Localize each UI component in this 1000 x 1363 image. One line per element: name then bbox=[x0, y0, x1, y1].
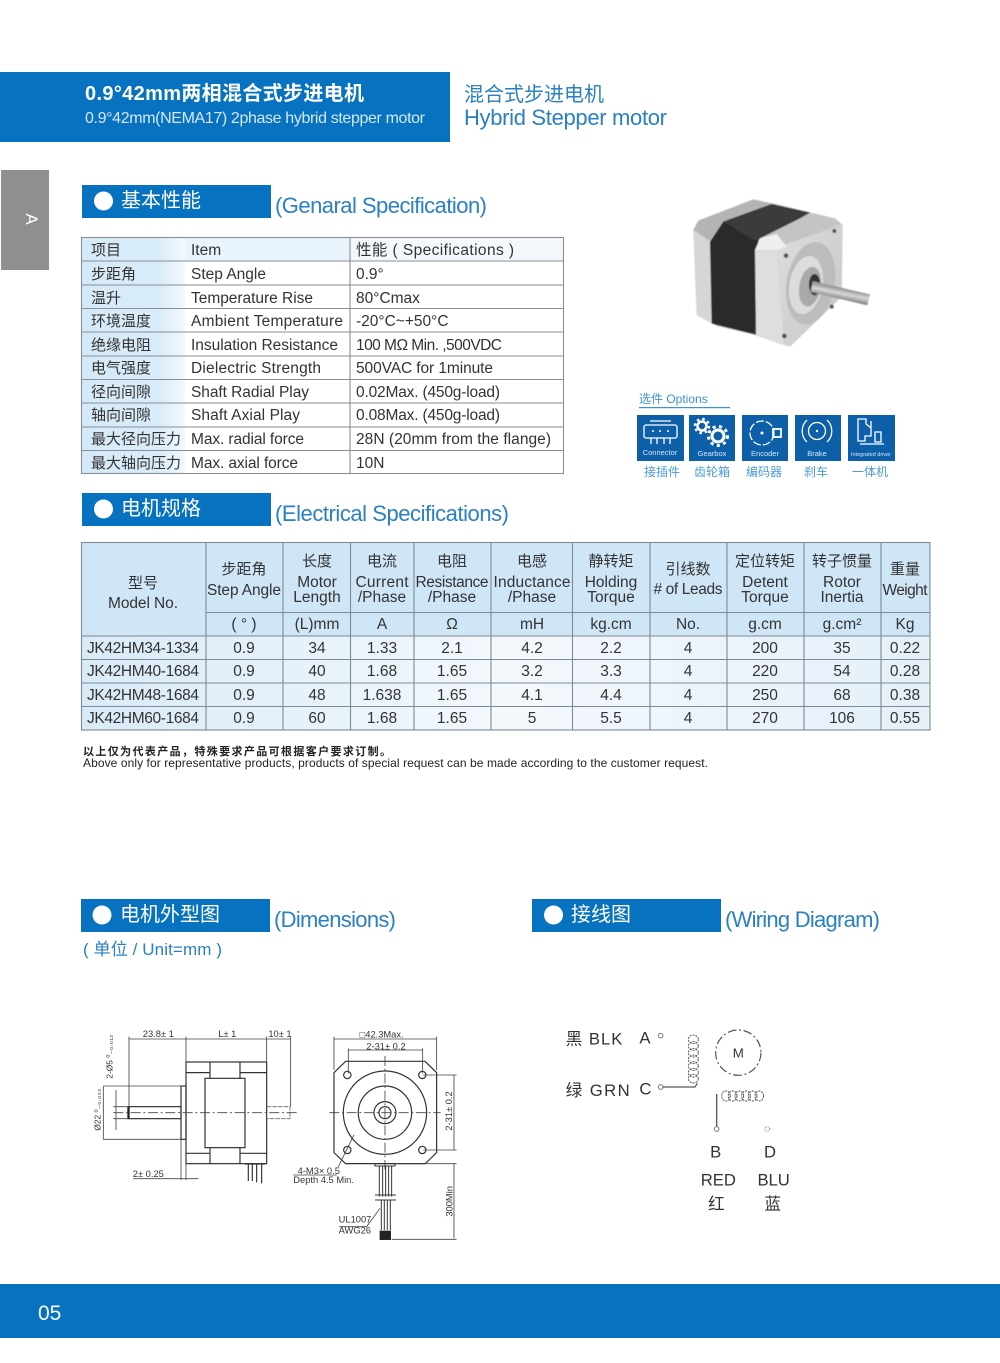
table rows: electrical specifications: JK42HM34-1334 bbox=[87, 640, 199, 657]
table rows: electrical specifications: 1.33 bbox=[367, 640, 397, 657]
table header: electrical specifications: 长度 bbox=[302, 553, 332, 570]
table rows: general specification bbox=[91, 241, 551, 472]
table units: electrical specifications bbox=[231, 616, 914, 633]
wiring diagram: 黑 BLK bbox=[566, 1029, 622, 1048]
motor photo bbox=[693, 199, 870, 347]
side tab: A bbox=[1, 170, 49, 270]
coil: B-D bbox=[722, 1091, 764, 1101]
table rows: electrical specifications: 3.2 bbox=[521, 663, 543, 680]
table header: electrical specifications: 重量 bbox=[890, 561, 920, 578]
table rows: general specification: Ambient Temperature bbox=[191, 313, 343, 330]
table rows: general specification: 0.9° bbox=[356, 266, 384, 283]
table rows: general specification: 10N bbox=[356, 455, 384, 472]
heading: general specification: (Genaral Specification) bbox=[275, 193, 487, 218]
table rows: general specification: 项目 bbox=[91, 242, 121, 259]
heading: dimensions: 电机外型图 bbox=[120, 903, 220, 926]
side view: 2-Ø5 ⁰₋₀.₀₁₂ bbox=[105, 1035, 115, 1079]
table rows: electrical specifications: 4 bbox=[684, 640, 693, 657]
table rows: general specification: Shaft Radial Play bbox=[191, 384, 309, 401]
table rows: general specification: Max. axial force bbox=[191, 455, 298, 472]
table rows: electrical specifications: 0.9 bbox=[233, 687, 255, 704]
table rows: general specification: Max. radial force bbox=[191, 431, 304, 448]
table rows: general specification: 性能 ( Specifications ) bbox=[356, 241, 514, 259]
table header: electrical specifications: 定位转矩 bbox=[735, 553, 795, 570]
wiring diagram: A bbox=[639, 1029, 651, 1048]
side view: L± 1 bbox=[218, 1029, 236, 1039]
table rows: electrical specifications: 34 bbox=[308, 640, 326, 657]
options heading bbox=[639, 392, 730, 408]
heading: wiring diagram: 接线图 bbox=[571, 903, 631, 926]
table rows: electrical specifications: 35 bbox=[833, 640, 851, 657]
table rows: electrical specifications: 1.68 bbox=[367, 663, 397, 680]
category title: 混合式步进电机 bbox=[464, 83, 604, 106]
table rows: electrical specifications: 250 bbox=[752, 687, 778, 704]
table rows: general specification: 轴向间隙 bbox=[91, 407, 151, 424]
options labels: 齿轮箱 bbox=[694, 464, 730, 479]
table rows: general specification: 绝缘电阻 bbox=[91, 337, 151, 354]
icon: encoder: Encoder bbox=[751, 449, 779, 458]
table rows: electrical specifications: 1.68 bbox=[367, 710, 397, 727]
table rows: general specification: 最大轴向压力 bbox=[91, 455, 181, 472]
table rows: general specification: Temperature Rise bbox=[191, 290, 313, 307]
heading: dimensions bbox=[81, 899, 396, 959]
table header: electrical specifications: Inertia bbox=[820, 589, 864, 606]
table header: electrical specifications: Resistance bbox=[416, 574, 488, 591]
icon: gearbox bbox=[689, 415, 735, 461]
table units: electrical specifications: No. bbox=[676, 616, 700, 633]
motor symbol: M bbox=[733, 1046, 744, 1061]
side view bbox=[93, 1029, 298, 1183]
wire: B bbox=[715, 1094, 719, 1127]
wiring diagram: B bbox=[710, 1142, 721, 1161]
table rows: general specification: Item bbox=[191, 242, 221, 259]
heading: dimensions: ( 单位 / Unit=mm ) bbox=[83, 940, 222, 959]
front view: Depth 4.5 Min. bbox=[293, 1175, 354, 1185]
table units: electrical specifications: A bbox=[377, 616, 388, 633]
table header: electrical specifications: Torque bbox=[587, 589, 635, 606]
icon: connector: Connector bbox=[643, 448, 678, 457]
side tab: A: A bbox=[22, 213, 41, 225]
table units: electrical specifications: (L)mm bbox=[295, 616, 339, 633]
table header: electrical specifications bbox=[108, 553, 928, 612]
options labels bbox=[644, 464, 888, 479]
table header: electrical specifications: 步距角 bbox=[221, 561, 267, 578]
table rows: electrical specifications: 60 bbox=[308, 710, 326, 727]
front view bbox=[293, 1029, 457, 1240]
side view: Ø22 ⁰₋₀.₀₃₃ bbox=[93, 1089, 103, 1131]
table rows: general specification: 0.02Max. (450g-load) bbox=[356, 384, 500, 401]
table units: electrical specifications: ( ° ) bbox=[231, 616, 257, 633]
wiring diagram: 蓝 bbox=[764, 1194, 781, 1213]
wiring diagram: RED bbox=[701, 1171, 736, 1190]
table rows: electrical specifications: 4 bbox=[684, 663, 693, 680]
table: general specification bbox=[81, 237, 564, 474]
category title bbox=[464, 83, 667, 130]
table rows: electrical specifications: 3.3 bbox=[600, 663, 622, 680]
footnote bbox=[83, 744, 708, 770]
table rows: general specification: 500VAC for 1minute bbox=[356, 360, 493, 377]
table rows: electrical specifications: 48 bbox=[308, 687, 326, 704]
table rows: general specification: 电气强度 bbox=[91, 360, 151, 377]
wiring diagram: 绿 GRN bbox=[566, 1081, 630, 1100]
table header: electrical specifications: Step Angle bbox=[207, 582, 281, 599]
heading: general specification: 基本性能 bbox=[121, 189, 201, 212]
options labels: 刹车 bbox=[804, 464, 828, 479]
icon: integrated driver bbox=[848, 415, 895, 461]
table header: electrical specifications: 电阻 bbox=[437, 553, 467, 570]
table rows: general specification: 100 MΩ Min. ,500VDC bbox=[356, 337, 502, 354]
table header: electrical specifications: 引线数 bbox=[665, 561, 711, 578]
table rows: general specification: Insulation Resistance bbox=[191, 337, 338, 354]
wiring diagram: D bbox=[764, 1142, 776, 1161]
table rows: electrical specifications: 1.65 bbox=[437, 663, 467, 680]
dimension drawing bbox=[93, 1029, 457, 1240]
table header: electrical specifications: /Phase bbox=[428, 589, 476, 606]
table header: electrical specifications: 转子惯量 bbox=[812, 553, 872, 570]
table rows: electrical specifications: 1.65 bbox=[437, 710, 467, 727]
table rows: general specification: 最大径向压力 bbox=[91, 431, 181, 448]
table header: electrical specifications: # of Leads bbox=[654, 581, 723, 598]
footer bar bbox=[0, 1284, 1000, 1338]
icon: brake bbox=[795, 415, 841, 461]
wiring diagram bbox=[566, 1029, 790, 1213]
table rows: general specification: Shaft Axial Play bbox=[191, 407, 300, 424]
table rows: electrical specifications: 270 bbox=[752, 710, 778, 727]
table header: electrical specifications: /Phase bbox=[358, 589, 406, 606]
table rows: general specification: 环境温度 bbox=[91, 312, 151, 330]
title banner: 0.9°42mm两相混合式步进电机 bbox=[85, 82, 364, 105]
table rows: general specification: 0.08Max. (450g-load) bbox=[356, 407, 500, 424]
heading: wiring diagram: (Wiring Diagram) bbox=[725, 907, 880, 932]
side view: 23.8± 1 bbox=[143, 1029, 174, 1039]
table units: electrical specifications: Ω bbox=[446, 616, 458, 633]
table header: electrical specifications: 电感 bbox=[517, 553, 547, 570]
table rows: electrical specifications: JK42HM60-1684 bbox=[87, 710, 199, 727]
footnote: 以上仅为代表产品，特殊要求产品可根据客户要求订制。 bbox=[83, 744, 391, 758]
table rows: electrical specifications: 220 bbox=[752, 663, 778, 680]
table rows: electrical specifications: 1.65 bbox=[437, 687, 467, 704]
table rows: electrical specifications: 5 bbox=[528, 710, 536, 727]
wiring diagram: 红 bbox=[708, 1194, 725, 1213]
heading: wiring diagram bbox=[532, 899, 880, 932]
table rows: electrical specifications: 106 bbox=[829, 710, 855, 727]
table rows: electrical specifications: 4 bbox=[684, 710, 693, 727]
coil: A-C bbox=[688, 1035, 698, 1083]
table rows: general specification: 径向间隙 bbox=[91, 384, 151, 401]
table rows: electrical specifications: 4.1 bbox=[521, 687, 543, 704]
front view: 300Min bbox=[445, 1186, 455, 1217]
table rows: electrical specifications: 0.28 bbox=[890, 663, 920, 680]
footer bar: 05 bbox=[38, 1302, 61, 1325]
category title: Hybrid Stepper motor bbox=[464, 105, 667, 130]
table rows: electrical specifications: JK42HM40-1684 bbox=[87, 663, 199, 680]
table rows: electrical specifications: 4 bbox=[684, 687, 693, 704]
heading: general specification bbox=[82, 185, 487, 218]
table rows: electrical specifications: 1.638 bbox=[363, 687, 401, 704]
title banner: 0.9°42mm(NEMA17) 2phase hybrid stepper motor bbox=[85, 110, 426, 127]
icon: integrated driver: Integrated driver bbox=[851, 452, 891, 458]
options labels: 一体机 bbox=[852, 465, 888, 479]
table header: electrical specifications: Length bbox=[293, 589, 341, 606]
table rows: electrical specifications: 0.55 bbox=[890, 710, 920, 727]
table units: electrical specifications: Kg bbox=[896, 616, 914, 633]
heading: dimensions: (Dimensions) bbox=[274, 907, 396, 932]
table rows: electrical specifications: 200 bbox=[752, 640, 778, 657]
table rows: general specification: 温升 bbox=[91, 290, 121, 307]
table header: electrical specifications: Detent bbox=[742, 574, 789, 591]
table header: electrical specifications: /Phase bbox=[508, 589, 556, 606]
table rows: electrical specifications: 5.5 bbox=[600, 710, 622, 727]
table rows: general specification: Step Angle bbox=[191, 266, 266, 283]
table rows: electrical specifications bbox=[87, 640, 920, 727]
table header: electrical specifications: Holding bbox=[585, 574, 637, 591]
table rows: electrical specifications: 0.9 bbox=[233, 710, 255, 727]
options labels: 接插件 bbox=[644, 464, 680, 479]
table header: electrical specifications: Model No. bbox=[108, 595, 178, 612]
heading: electrical specifications bbox=[82, 493, 509, 526]
wire: C bbox=[663, 1083, 697, 1087]
footnote: Above only for representative products, products of special request can be made according to the customer request. bbox=[83, 756, 708, 770]
table header: electrical specifications: Weight bbox=[882, 582, 928, 599]
table header: electrical specifications: 型号 bbox=[128, 575, 158, 592]
icon: gearbox: Gearbox bbox=[698, 449, 727, 458]
table rows: general specification: Dielectric Strength bbox=[191, 360, 321, 377]
motor symbol bbox=[716, 1030, 761, 1075]
table rows: general specification: 步距角 bbox=[91, 266, 136, 283]
table rows: electrical specifications: 4.4 bbox=[600, 687, 622, 704]
side view: 10± 1 bbox=[268, 1029, 292, 1039]
heading: electrical specifications: (Electrical Specifications) bbox=[275, 501, 509, 526]
table rows: electrical specifications: 40 bbox=[308, 663, 326, 680]
table header: electrical specifications: Rotor bbox=[823, 574, 861, 591]
table units: electrical specifications: mH bbox=[520, 616, 544, 633]
front view: □42.3Max. bbox=[360, 1029, 404, 1039]
front view: 2-31± 0.2 bbox=[366, 1041, 406, 1051]
table rows: electrical specifications: 0.9 bbox=[233, 663, 255, 680]
table rows: electrical specifications: 0.38 bbox=[890, 687, 920, 704]
table header: electrical specifications: Inductance bbox=[494, 574, 570, 591]
table rows: electrical specifications: 2.1 bbox=[441, 640, 463, 657]
front view: 4-M3× 0.5 bbox=[298, 1166, 340, 1176]
table rows: general specification: -20°C~+50°C bbox=[356, 313, 449, 330]
table rows: electrical specifications: 4.2 bbox=[521, 640, 543, 657]
table rows: electrical specifications: 0.22 bbox=[890, 640, 920, 657]
table units: electrical specifications: g.cm² bbox=[823, 616, 861, 633]
wiring diagram: C bbox=[639, 1079, 651, 1098]
table rows: electrical specifications: 54 bbox=[833, 663, 851, 680]
table rows: electrical specifications: 2.2 bbox=[600, 640, 622, 657]
table units: electrical specifications: kg.cm bbox=[590, 616, 632, 633]
table header: electrical specifications: Motor bbox=[297, 574, 337, 591]
table rows: electrical specifications: 0.9 bbox=[233, 640, 255, 657]
table header: electrical specifications: 电流 bbox=[367, 553, 397, 570]
front view: 2-31± 0.2 bbox=[444, 1091, 454, 1131]
icon: connector bbox=[637, 415, 684, 461]
icon: encoder bbox=[742, 415, 788, 461]
table rows: electrical specifications: JK42HM48-1684 bbox=[87, 687, 199, 704]
table header: electrical specifications: 静转矩 bbox=[588, 553, 634, 570]
table header: electrical specifications: Torque bbox=[741, 589, 789, 606]
side view: 2± 0.25 bbox=[133, 1169, 164, 1179]
wiring diagram: BLU bbox=[757, 1171, 790, 1190]
table: electrical specifications bbox=[81, 542, 930, 730]
icon: brake: Brake bbox=[807, 449, 827, 458]
front view: UL1007 bbox=[339, 1215, 371, 1225]
table header: electrical specifications: Current bbox=[356, 574, 409, 591]
title banner bbox=[0, 72, 450, 142]
options heading: 选件 Options bbox=[639, 392, 708, 406]
heading: electrical specifications: 电机规格 bbox=[121, 497, 201, 520]
table units: electrical specifications: g.cm bbox=[748, 616, 782, 633]
front view: AWG26 bbox=[339, 1225, 371, 1235]
options labels: 编码器 bbox=[746, 464, 782, 479]
table rows: general specification: 80°Cmax bbox=[356, 290, 420, 307]
table rows: general specification: 28N (20mm from the flange) bbox=[356, 431, 551, 448]
table rows: electrical specifications: 68 bbox=[833, 687, 851, 704]
